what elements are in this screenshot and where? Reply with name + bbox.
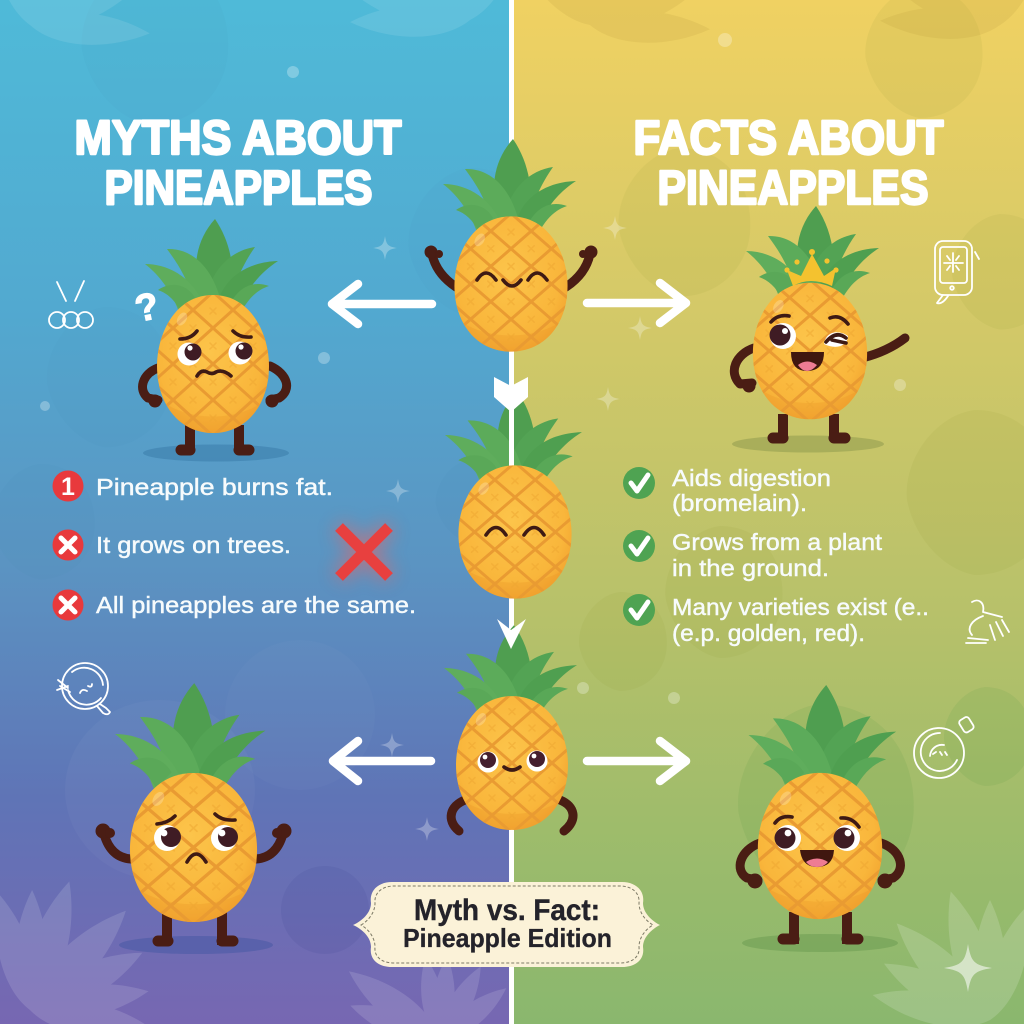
heading: myths: PINEAPPLES — [104, 162, 372, 215]
dashed trim — [361, 886, 653, 963]
fact 3: Many varieties exist (e.. — [672, 594, 929, 620]
icon: phone speech bubble — [935, 241, 979, 303]
arrow: center down 1 — [494, 377, 528, 412]
shadow — [742, 934, 898, 952]
pineapple: myth bottom, sad — [96, 673, 292, 1022]
icon: three rings with sparks — [49, 281, 93, 328]
myth 1 — [52, 470, 333, 502]
heading: facts: FACTS ABOUT — [634, 112, 944, 165]
banner: myth vs. fact: Pineapple Edition — [403, 923, 612, 953]
fact 2: in the ground. — [672, 555, 829, 581]
shadow — [143, 444, 289, 462]
banner text: Myth vs. Fact: — [414, 894, 600, 927]
fact 1 — [623, 465, 831, 516]
crown — [787, 254, 836, 286]
heading: myths — [74, 112, 402, 215]
fact 1: Aids digestion — [672, 465, 831, 491]
icon: hand with motion lines — [966, 600, 1009, 643]
panel: facts background — [511, 0, 1024, 1024]
arrow: bottom left — [333, 741, 431, 781]
fact 2 — [623, 529, 883, 581]
myth 3: All pineapples are the same. — [96, 592, 416, 618]
fact 1: (bromelain). — [672, 490, 807, 516]
heading: myths: MYTHS ABOUT — [74, 112, 402, 165]
myth 1: Pineapple burns fat. — [96, 474, 333, 500]
pineapple: center bottom, curious — [444, 606, 577, 920]
fact list — [623, 465, 929, 646]
pineapple: center middle, calm — [445, 376, 582, 688]
pineapple: myth worried — [131, 202, 289, 526]
heading: facts — [634, 112, 944, 215]
myth 3 — [52, 590, 416, 620]
arrow: center down 2 — [497, 619, 526, 649]
icon: magnifier — [57, 663, 110, 714]
shadow — [732, 436, 884, 452]
myth 1: 1 — [61, 473, 75, 501]
heading: facts: PINEAPPLES — [658, 162, 928, 215]
big sparkle — [944, 944, 992, 992]
banner: myth vs. fact — [353, 882, 660, 967]
fact 3: (e.p. golden, red). — [672, 620, 865, 646]
shadow — [119, 936, 273, 954]
question mark: ? — [131, 285, 163, 331]
myth 2 — [52, 530, 291, 560]
big red cross — [339, 527, 389, 577]
pineapple: fact winking with crown — [732, 191, 905, 511]
myth 2: It grows on trees. — [96, 532, 291, 558]
myth list — [52, 470, 416, 620]
arrow: top right — [587, 283, 686, 323]
fact 3 — [623, 594, 929, 646]
pineapple: center top, happy with raised arms — [424, 125, 598, 443]
arrow: top left — [332, 284, 432, 324]
fact 2: Grows from a plant — [672, 529, 883, 555]
icon: round bottle — [914, 716, 975, 778]
arrow: bottom right — [587, 741, 686, 781]
pineapple: fact bottom, cheerful — [740, 674, 900, 1018]
center divider — [509, 0, 514, 1024]
panel: myths background — [0, 0, 511, 1024]
